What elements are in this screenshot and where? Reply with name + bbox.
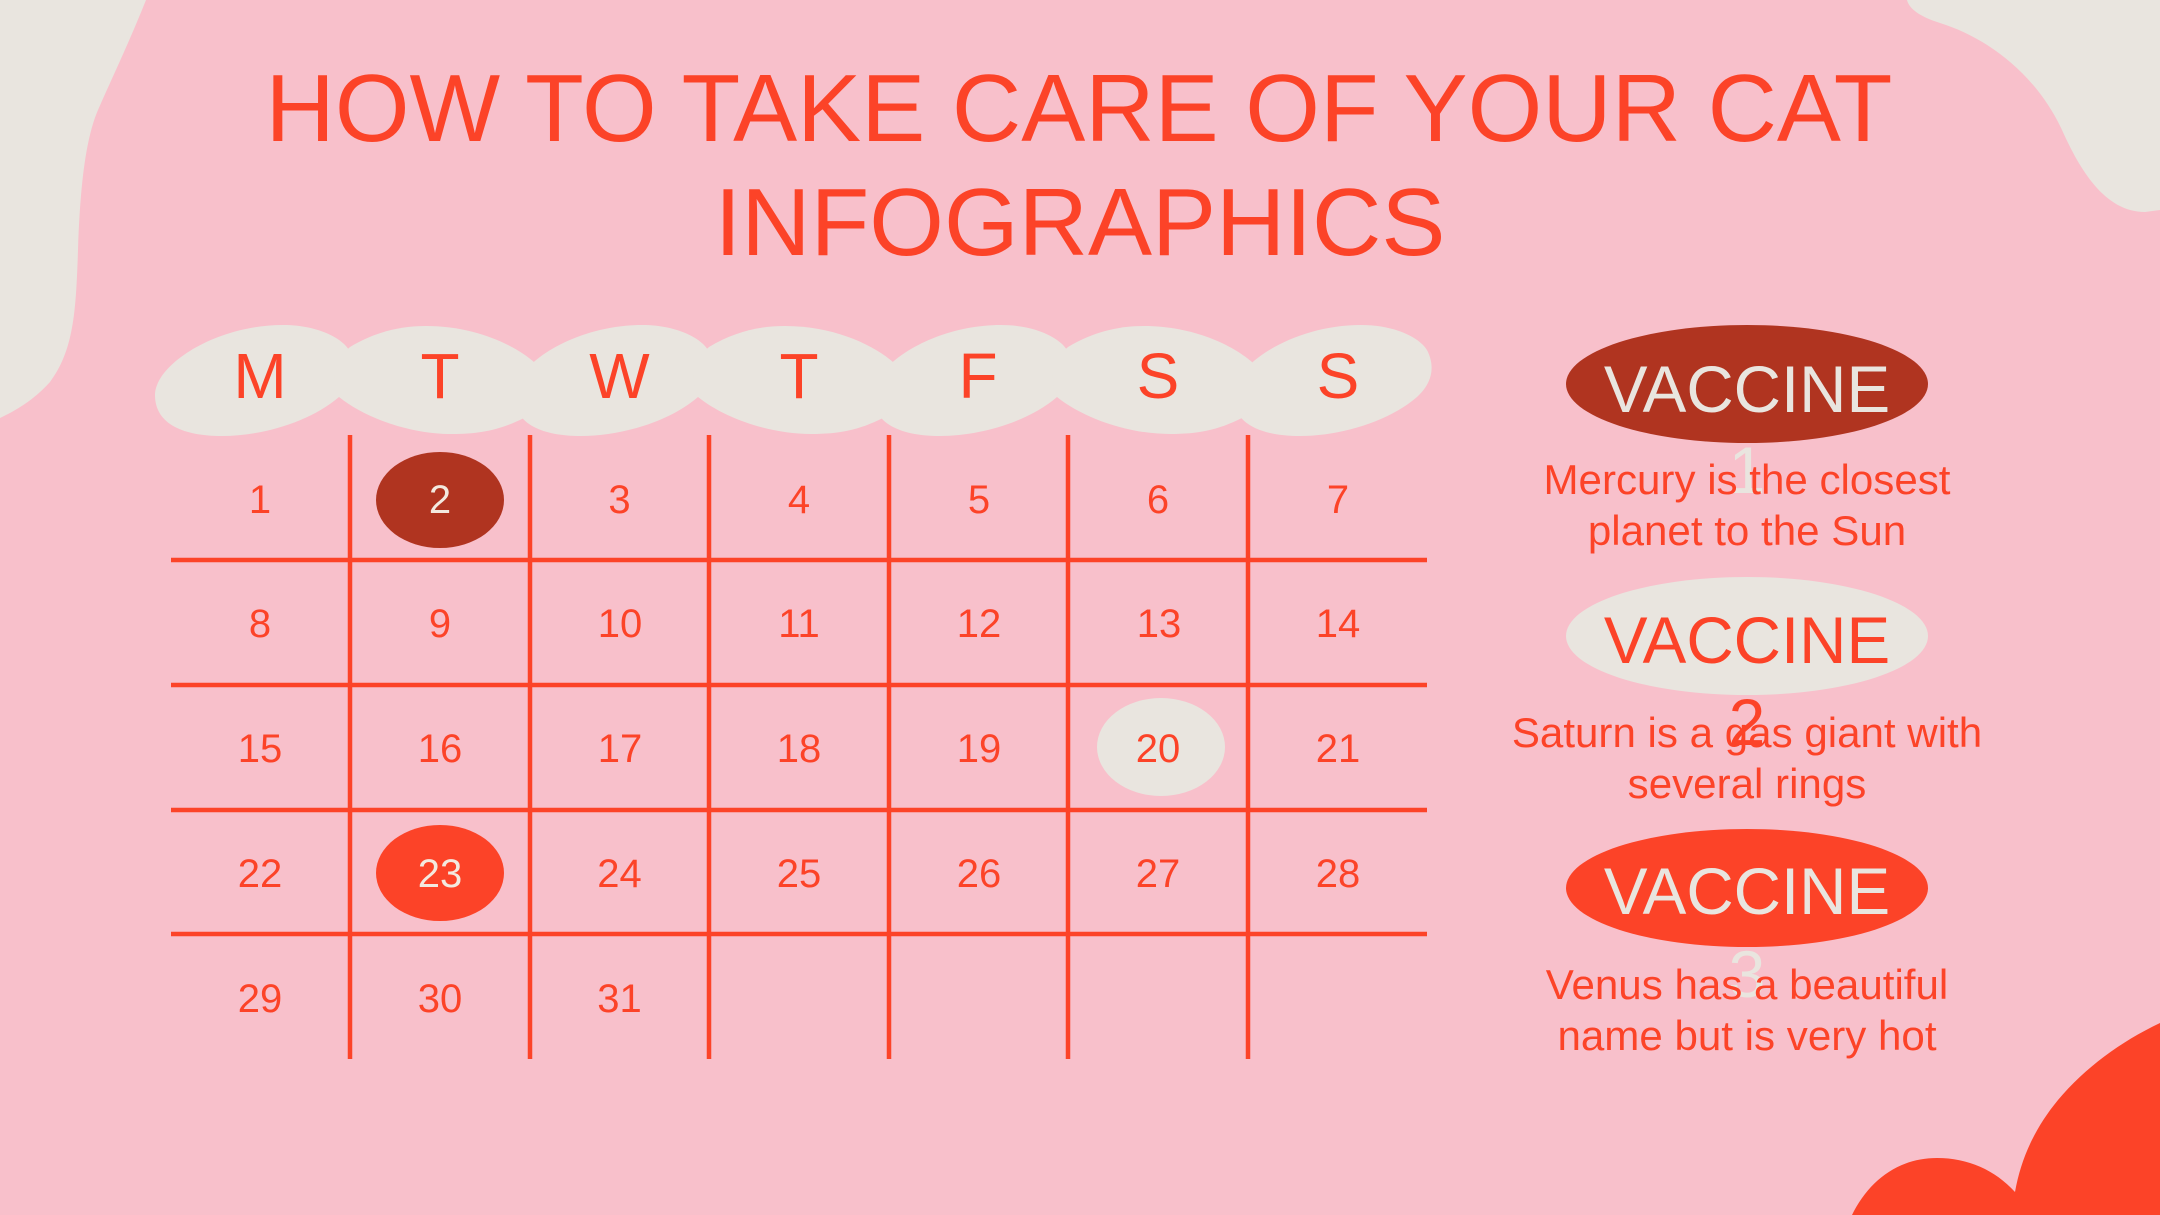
weekday letters: S — [1137, 340, 1179, 412]
weekday letters: W — [589, 340, 650, 412]
pill: vaccine 1 — [1566, 325, 1928, 443]
day numbers: 18 — [777, 727, 821, 771]
day numbers: 13 — [1137, 602, 1181, 646]
day numbers: 22 — [238, 852, 282, 896]
description 3: Venus has a beautiful — [1546, 961, 1948, 1008]
day numbers: 28 — [1316, 852, 1360, 896]
day numbers: 3 — [608, 478, 631, 522]
day numbers: 6 — [1147, 478, 1169, 522]
day numbers: 27 — [1136, 852, 1180, 896]
day numbers: 10 — [598, 602, 642, 646]
panel: vaccine 3 — [1546, 829, 1948, 1059]
decoration: top-left cream blob — [0, 0, 146, 418]
weekday letters: M — [233, 340, 287, 412]
weekday letters: T — [779, 340, 819, 412]
number 1: 1 — [1729, 433, 1765, 507]
day numbers: 4 — [788, 478, 810, 522]
label: vaccine 3: VACCINE — [1604, 855, 1890, 928]
description 1: Mercury is the closest — [1543, 456, 1951, 503]
description 3: name but is very hot — [1557, 1012, 1937, 1059]
pill: vaccine 3 — [1566, 829, 1928, 947]
day numbers: 8 — [249, 602, 271, 646]
day numbers: 17 — [598, 727, 642, 771]
day numbers: 14 — [1316, 602, 1360, 646]
weekday letters: T — [420, 340, 460, 412]
day numbers: 5 — [968, 478, 990, 522]
day numbers: 12 — [957, 602, 1001, 646]
day numbers: 24 — [597, 852, 642, 896]
calendar — [155, 325, 1432, 1059]
day numbers: 2 — [429, 478, 451, 522]
day numbers: 29 — [238, 977, 282, 1021]
day numbers: 15 — [238, 727, 282, 771]
day numbers: 20 — [1136, 727, 1180, 771]
weekday letters: S — [1317, 340, 1359, 412]
day numbers: 1 — [249, 478, 271, 522]
day numbers: 9 — [429, 602, 451, 646]
weekday letters: F — [958, 340, 998, 412]
highlighted day: 2 — [376, 452, 504, 548]
weekday header blobs — [155, 325, 1432, 436]
number 2: 2 — [1729, 685, 1765, 759]
label: vaccine 1: VACCINE — [1604, 353, 1890, 426]
panel: vaccine 1 — [1543, 325, 1951, 554]
title: INFOGRAPHICS — [715, 169, 1445, 276]
title: HOW TO TAKE CARE OF YOUR CAT — [266, 55, 1892, 162]
day numbers: 7 — [1327, 478, 1349, 522]
highlighted day: 20 — [1097, 698, 1225, 796]
day numbers — [238, 478, 1360, 1021]
description 2 — [1512, 709, 1982, 807]
day numbers: 30 — [418, 977, 462, 1021]
title — [266, 55, 1892, 276]
panel: vaccine 2 — [1512, 577, 1982, 807]
number 3: 3 — [1729, 937, 1765, 1011]
highlighted day: 23 — [376, 825, 504, 921]
day numbers: 16 — [418, 727, 462, 771]
description 3 — [1546, 961, 1948, 1059]
decoration: top-right cream blob — [1907, 0, 2160, 212]
weekday letters — [233, 340, 1359, 412]
day numbers: 23 — [418, 852, 462, 896]
pill: vaccine 2 — [1566, 577, 1928, 695]
label: vaccine 2: VACCINE — [1604, 604, 1890, 677]
day numbers: 25 — [777, 852, 821, 896]
calendar grid — [171, 435, 1427, 1059]
description 1 — [1543, 456, 1951, 554]
day numbers: 26 — [957, 852, 1001, 896]
day numbers: 19 — [957, 727, 1001, 771]
description 2: Saturn is a gas giant with — [1512, 709, 1982, 756]
description 2: several rings — [1628, 760, 1866, 807]
description 1: planet to the Sun — [1588, 507, 1906, 554]
day numbers: 11 — [778, 602, 820, 646]
decoration: bottom-right red blob — [1852, 1023, 2160, 1215]
day numbers: 21 — [1316, 727, 1360, 771]
day numbers: 31 — [597, 977, 642, 1021]
